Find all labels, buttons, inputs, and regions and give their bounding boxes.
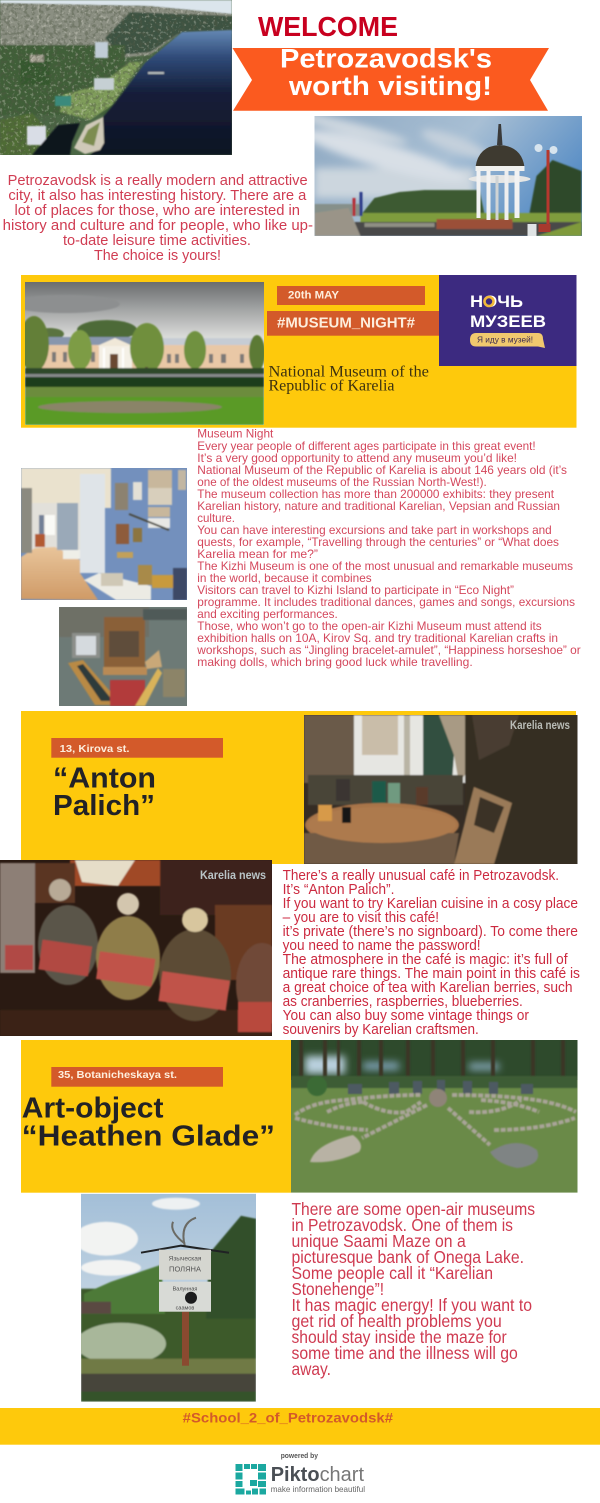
logo: Night of Museums — [439, 275, 576, 366]
text: Museum Night article: and exciting performances. — [197, 607, 338, 621]
intro text: The choice is yours! — [94, 248, 221, 264]
text: Heathen Glade article: There are some open-air museums — [292, 1199, 535, 1219]
text: Anton Palich article: it’s private (there’s no signboard). To come there — [283, 924, 578, 940]
heading: Anton Palich: “Anton — [53, 763, 156, 795]
heading: WELCOME: WELCOME — [258, 11, 398, 42]
photo: tea jars — [0, 860, 288, 1036]
text: Museum Night article: Visitors can travel to Kizhi Island to participate in “Eco Night” — [197, 583, 514, 597]
address bar: 35, Botanicheskaya st. — [58, 1069, 177, 1081]
text: Anton Palich article: There’s a really unusual café in Petrozavodsk. — [283, 868, 559, 884]
text: Museum Night article: exhibition halls on 10A, Kirov Sq. and try traditional Karelian crafts in — [197, 631, 558, 645]
museum name: Republic of Karelia — [268, 378, 395, 395]
hashtag bar — [267, 311, 439, 336]
logo: Night of Museums: МУЗЕЕВ — [470, 312, 546, 331]
hashtag bar: #MUSEUM_NIGHT# — [277, 314, 416, 332]
panel: Heathen Glade — [21, 1040, 291, 1193]
heading: Art-object Heathen Glade: Art-object — [22, 1093, 164, 1125]
title ribbon: worth visiting! — [288, 71, 492, 101]
icon: Piktochart logo mark — [236, 1464, 266, 1494]
text: Museum Night article: quests, for example, “Travelling through the centuries” or “What does — [197, 535, 559, 549]
photo: Heathen Glade sign — [74, 1194, 256, 1402]
text: Anton Palich article: You can also buy some vintage things or — [283, 1008, 529, 1024]
text: Anton Palich article — [283, 868, 580, 1038]
text: Heathen Glade article: unique Saami Maze on a — [292, 1231, 466, 1251]
text: Museum Night article: culture. — [197, 511, 235, 525]
logo: Night of Museums: НОЧЬ — [470, 292, 523, 311]
text: Museum Night article: It’s a very good opportunity to attend any museum you’d like! — [197, 451, 517, 465]
text: Heathen Glade article: some time and the illness will go — [292, 1343, 518, 1363]
credit: powered by Piktochart: Piktochart — [271, 1464, 364, 1486]
text: Anton Palich article: you need to name the password! — [283, 938, 481, 954]
photo: stone maze — [291, 1040, 578, 1193]
text: Museum Night article: workshops, such as “Jingling bracelet-amulet”, “Happiness horseshoe” or — [196, 643, 581, 657]
credit: powered by Piktochart: make information beautiful — [271, 1485, 365, 1494]
title ribbon — [232, 44, 549, 111]
text: Museum Night article: programme. It includes traditional dances, games and songs, excursions — [197, 595, 575, 609]
text: Heathen Glade article: picturesque bank of Onega Lake. — [292, 1247, 524, 1267]
date bar — [277, 286, 425, 305]
text: Heathen Glade article: It has magic energy! If you want to — [292, 1295, 532, 1315]
heading: Anton Palich — [53, 763, 156, 822]
text: Museum Night article: Those, who won’t go to the open-air Kizhi Museum must attend its — [197, 619, 542, 633]
text: Museum Night article: in the world, because it combines — [197, 571, 372, 585]
text: Anton Palich article: If you want to try Karelian cuisine in a cosy place — [283, 896, 578, 912]
text: Anton Palich article: It’s “Anton Palich”. — [283, 882, 394, 898]
museum name: National Museum of the — [268, 364, 429, 381]
text: Anton Palich article: as cranberries, raspberries, blueberries. — [283, 994, 523, 1010]
text: Museum Night article: The Kizhi Museum is one of the most unusual and remarkable museums — [197, 559, 573, 573]
intro text: history and culture and for people, who like up- — [3, 218, 313, 234]
text: Museum Night article: making dolls, which bring good luck while travelling. — [197, 655, 473, 669]
text: Heathen Glade article: in Petrozavodsk. One of them is — [292, 1215, 513, 1235]
intro text: lot of places for those, who are interested in — [14, 203, 300, 219]
intro text: Petrozavodsk is a really modern and attractive — [8, 173, 308, 189]
text: Museum Night article: National Museum of the Republic of Karelia is about 146 years old (it’s — [197, 463, 567, 477]
text: Museum Night article: one of the oldest museums of the Russian North-West!). — [197, 475, 487, 489]
photo: Heathen Glade sign: Валунная — [173, 1287, 197, 1293]
heading: Art-object Heathen Glade: “Heathen Glade” — [22, 1121, 275, 1153]
photo: Heathen Glade sign: Языческая — [169, 1256, 202, 1263]
photo: rotunda on the embankment — [290, 108, 582, 236]
text: Anton Palich article: antique rare things. The main point in this café is — [283, 966, 580, 982]
panel: Anton Palich — [21, 711, 578, 864]
heading: Anton Palich: Palich” — [53, 790, 155, 822]
text: Anton Palich article: a great choice of tea with Karelian berries, such — [283, 980, 573, 996]
photo: Heathen Glade sign: ПОЛЯНА — [169, 1265, 201, 1274]
credit: powered by Piktochart — [236, 1451, 365, 1494]
text: Anton Palich article: souvenirs by Karelian craftsmen. — [283, 1022, 479, 1038]
photo: museum exhibition hall — [21, 468, 187, 600]
text: Museum Night article: Karelia mean for me?” — [197, 547, 318, 561]
intro text — [3, 173, 313, 264]
text: Anton Palich article: The atmosphere in the café is magic: it’s full of — [283, 952, 568, 968]
intro text: to-date leisure time activities. — [63, 233, 251, 249]
footer band — [0, 1408, 600, 1445]
text: Anton Palich article: – you are to visit this café! — [283, 910, 439, 926]
photo: Heathen Glade sign: саамов — [176, 1306, 194, 1312]
text: Museum Night article: Karelian history, nature and traditional Karelian, Vepsian and Russian — [197, 499, 560, 513]
logo: Night of Museums: Я иду в музей! — [477, 334, 533, 344]
text: Museum Night article: You can have interesting excursions and take part in workshops and — [197, 523, 552, 537]
text: Museum Night article — [196, 427, 581, 669]
date bar: 20th MAY — [288, 290, 340, 302]
text: Heathen Glade article: get rid of health problems you — [292, 1311, 502, 1331]
heading: Art-object Heathen Glade — [22, 1093, 275, 1153]
text: Heathen Glade article: Stonehenge”! — [292, 1279, 384, 1299]
address bar: 13, Kirova st. — [60, 743, 130, 755]
panel: Museum Night — [10, 275, 576, 428]
text: Heathen Glade article: away. — [292, 1359, 331, 1379]
address bar — [51, 738, 223, 758]
photo: aerial view of Petrozavodsk — [0, 0, 232, 155]
intro text: city, it also has interesting history. There are a — [8, 188, 307, 204]
title ribbon: Petrozavodsk's — [280, 44, 492, 74]
photo: cafe interior — [304, 715, 578, 864]
text: Museum Night article: Every year people of different ages participate in this great event! — [197, 439, 536, 453]
museum name — [268, 364, 429, 395]
text: Heathen Glade article: Some people call it “Karelian — [292, 1263, 493, 1283]
text: Museum Night article: Museum Night — [197, 427, 274, 441]
address bar — [51, 1067, 223, 1087]
photo: loom exhibit — [59, 607, 187, 706]
footer band: #School_2_of_Petrozavodsk# — [183, 1411, 394, 1426]
photo: National Museum building — [10, 282, 265, 425]
photo: tea jars: Karelia news — [200, 868, 266, 882]
text: Heathen Glade article: should stay inside the maze for — [292, 1327, 507, 1347]
text: Heathen Glade article — [292, 1199, 535, 1379]
text: Museum Night article: The museum collection has more than 200000 exhibits: they present — [197, 487, 555, 501]
credit: powered by Piktochart: powered by — [281, 1451, 319, 1460]
